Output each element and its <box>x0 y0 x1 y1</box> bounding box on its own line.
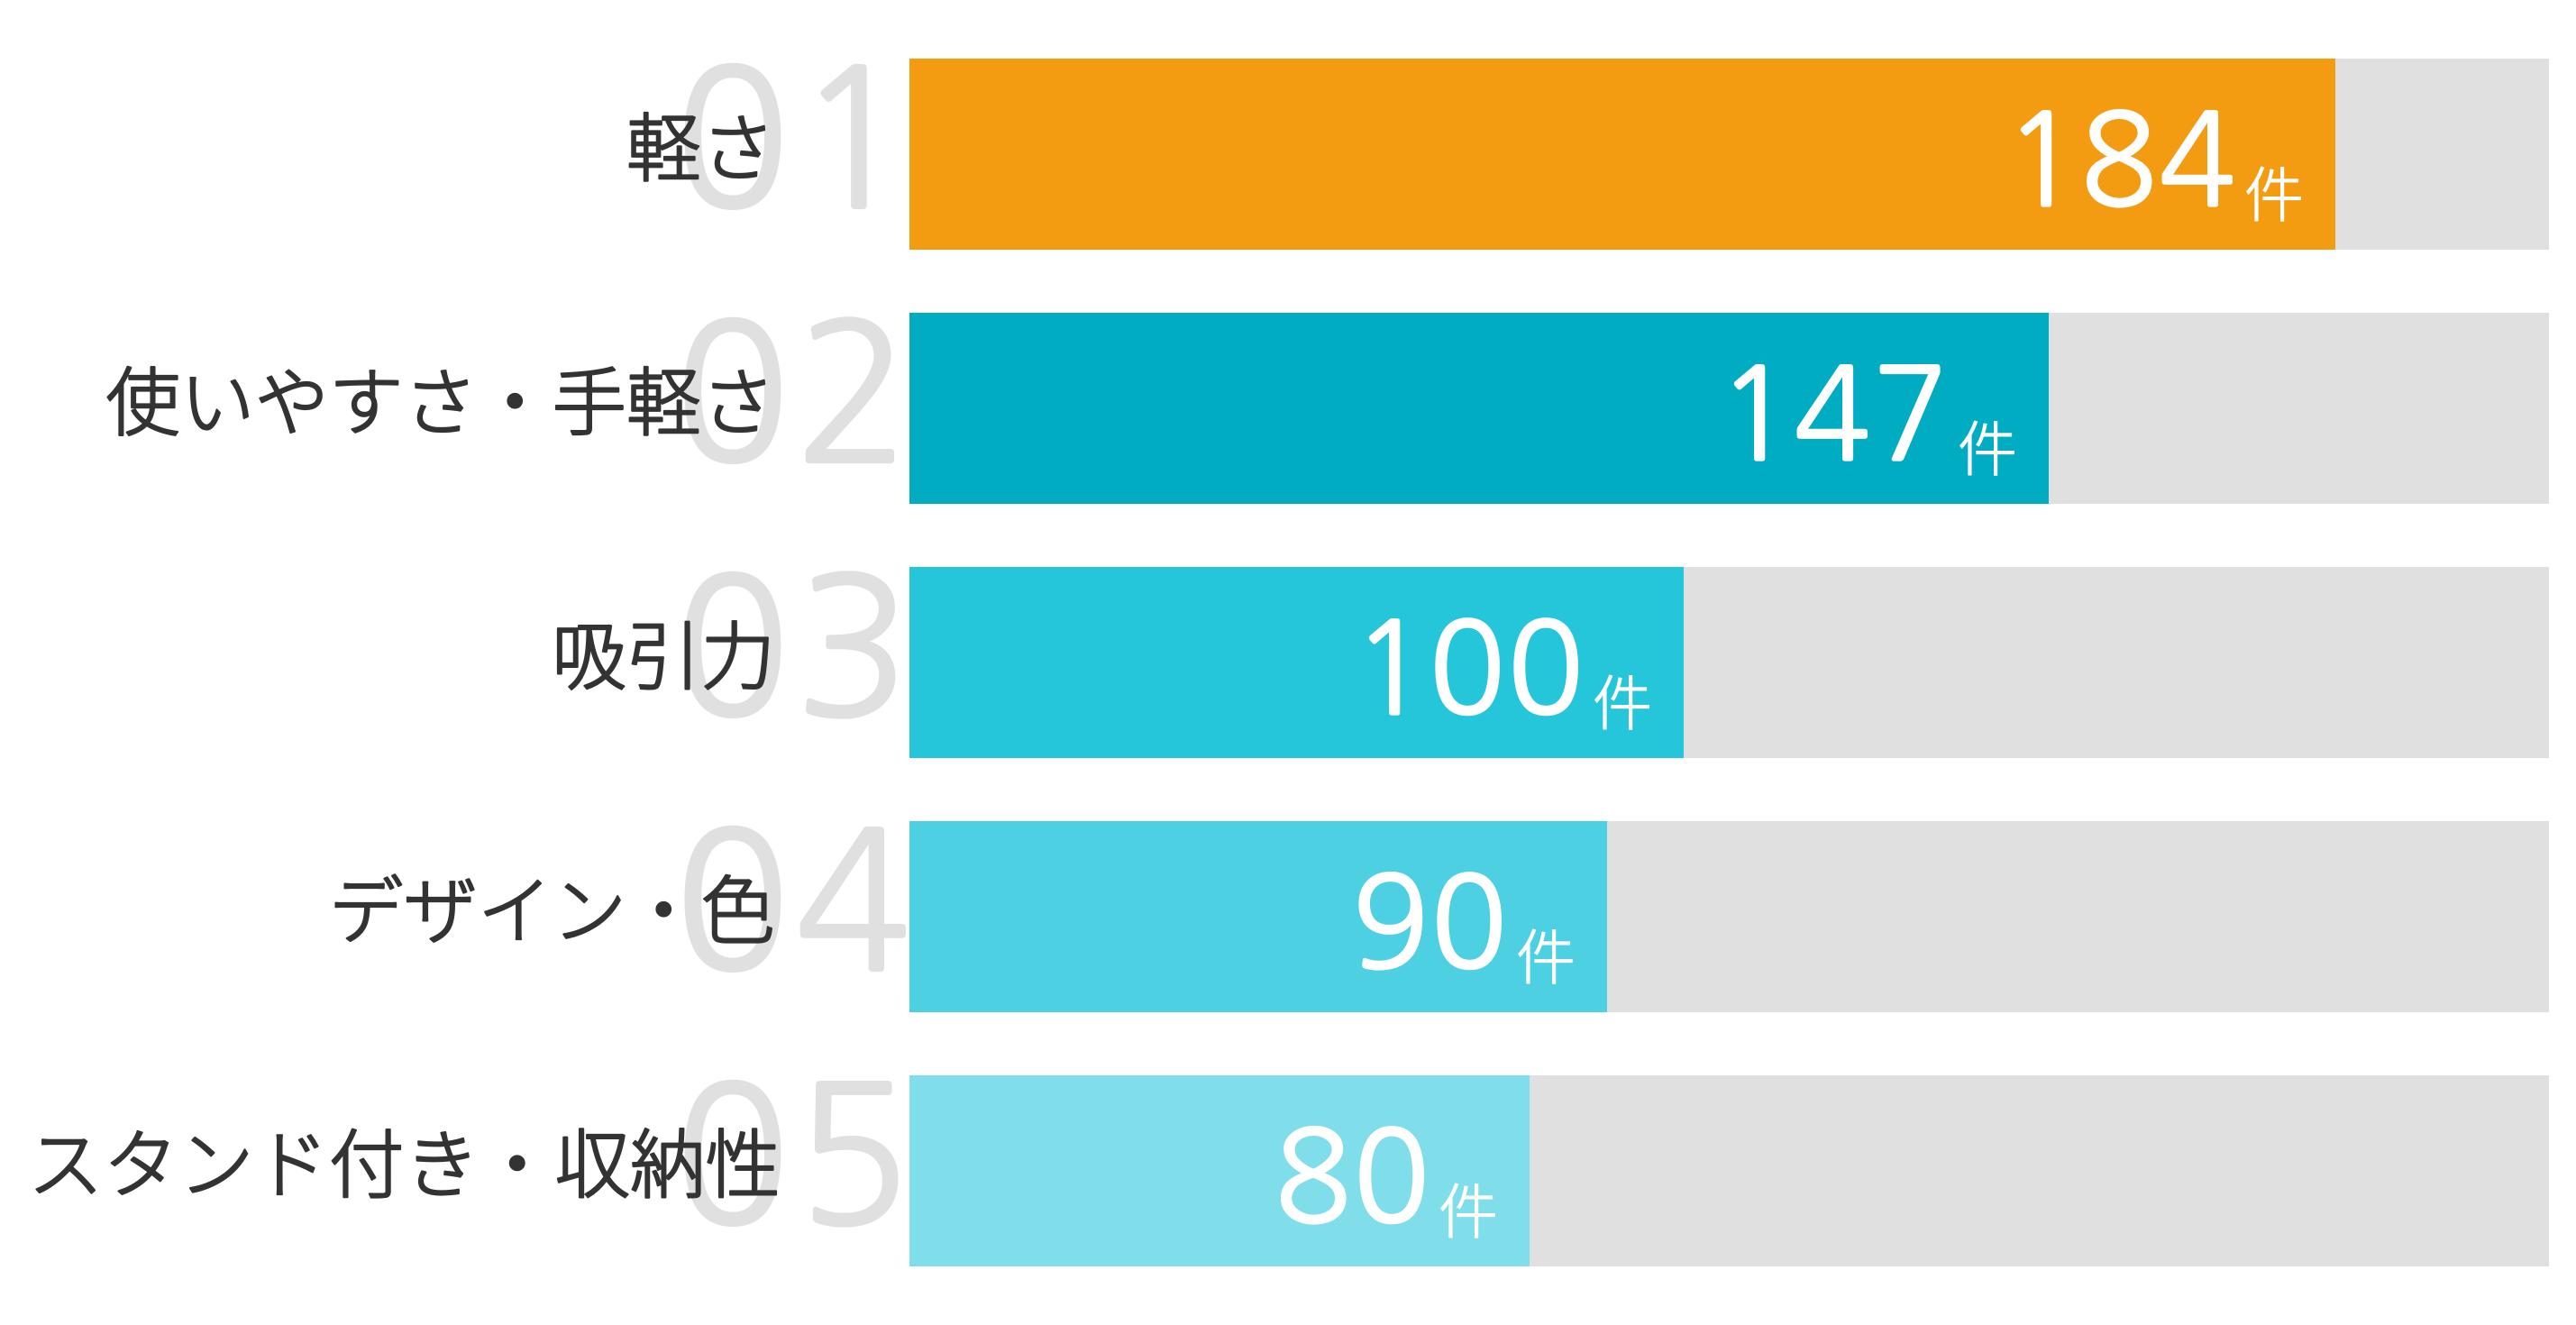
bar track 1 <box>909 59 2549 250</box>
bar track 2 <box>909 313 2549 504</box>
value 90件: 90 <box>1352 860 1507 987</box>
value 80件: 件 <box>1439 1179 1498 1246</box>
value 90件: 件 <box>1516 925 1576 991</box>
bar fill 90 <box>909 821 1607 1012</box>
value 184件: 184 <box>2004 97 2235 224</box>
bar fill 147 <box>909 313 2049 504</box>
row 4: デザイン・色 <box>329 807 2549 1012</box>
rank number 04: 04 <box>674 807 910 998</box>
value 90件 <box>1352 860 1576 991</box>
label デザイン・色: デザイン・色 <box>329 871 775 954</box>
row 3: 吸引力 <box>552 553 2549 758</box>
bar track 5 <box>909 1075 2549 1266</box>
rank number 01: 01 <box>674 44 910 235</box>
value 100件: 件 <box>1593 671 1652 737</box>
row 5: スタンド付き・収納性 <box>28 1061 2549 1266</box>
bar track 4 <box>909 821 2549 1012</box>
rank number 03: 03 <box>674 553 910 744</box>
label 吸引力: 吸引力 <box>552 617 775 699</box>
bar track 3 <box>909 567 2549 758</box>
value 80件: 80 <box>1274 1114 1430 1241</box>
value 184件: 件 <box>2244 162 2304 229</box>
rank number 05: 05 <box>674 1061 910 1252</box>
row 1: 軽さ <box>626 44 2549 250</box>
value 80件 <box>1274 1114 1498 1246</box>
bar fill 184 <box>909 59 2335 250</box>
value 147件: 147 <box>1717 352 1949 479</box>
value 147件: 件 <box>1958 416 2017 483</box>
label 軽さ: 軽さ <box>626 108 775 191</box>
rank number 02: 02 <box>674 298 910 489</box>
bar fill 100 <box>909 567 1684 758</box>
label 使いやすさ・手軽さ: 使いやすさ・手軽さ <box>106 362 775 445</box>
value 100件: 100 <box>1352 606 1584 733</box>
bar fill 80 <box>909 1075 1530 1266</box>
label スタンド付き・収納性: スタンド付き・収納性 <box>28 1123 781 1208</box>
row 2: 使いやすさ・手軽さ <box>106 298 2549 504</box>
